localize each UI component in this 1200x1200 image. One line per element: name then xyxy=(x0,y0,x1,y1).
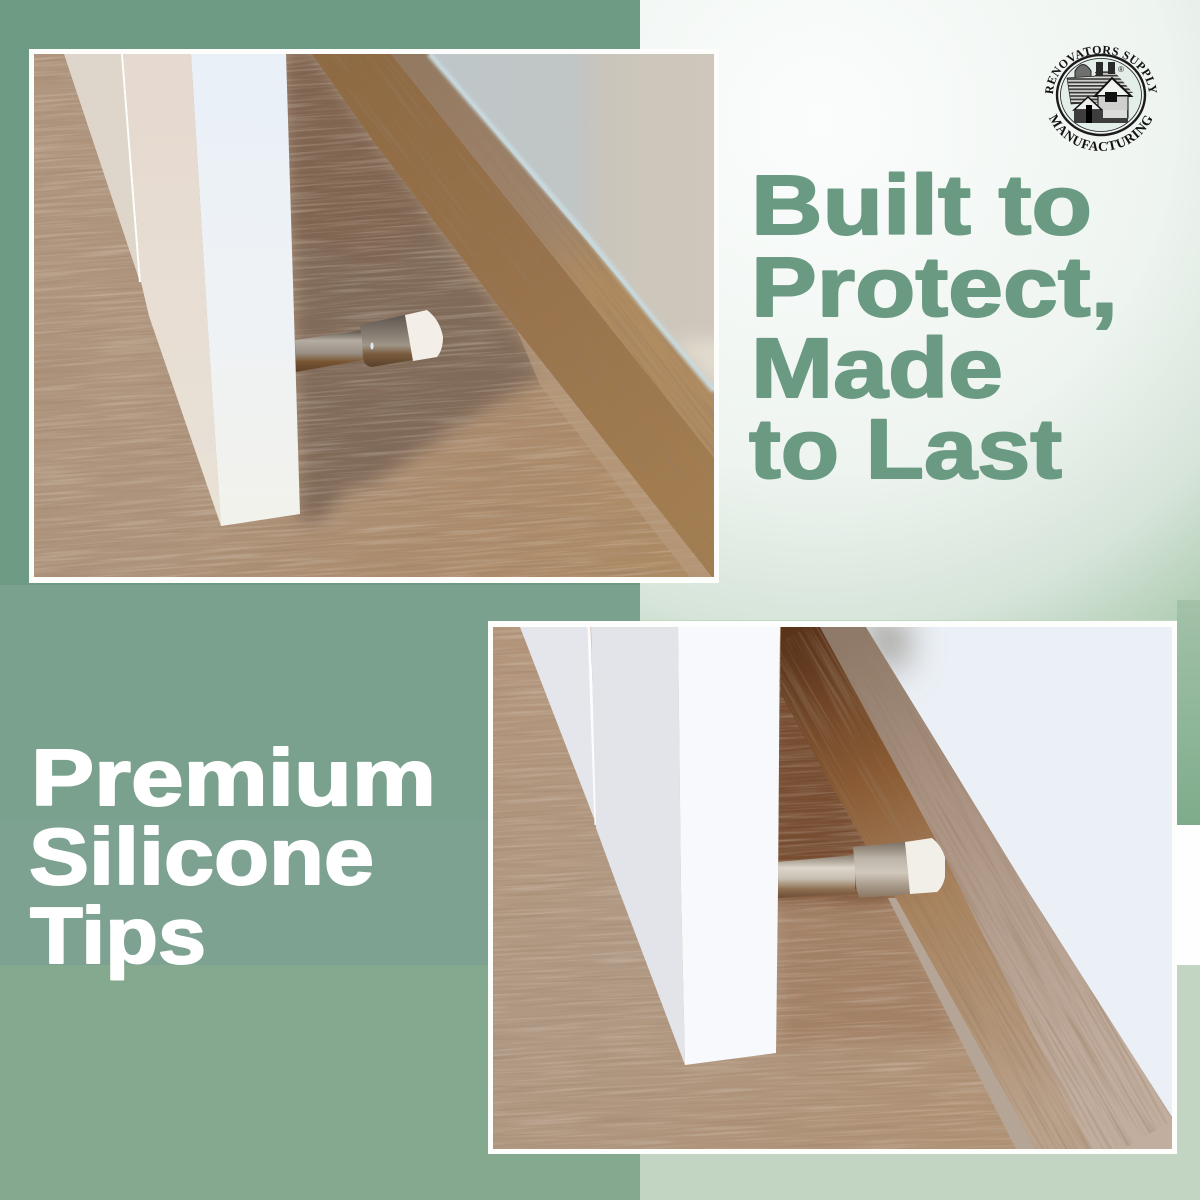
heading: Premium Silicone Tips: Tips xyxy=(30,891,206,980)
heading: Built to Protect, Made to Last: Protect, xyxy=(751,240,1118,334)
logo text: top arc: RENOVATORS SUPPLY xyxy=(1045,46,1157,94)
logo text: bottom arc: MANUFACTURING xyxy=(1048,113,1152,151)
photo: door stopper on door, close view xyxy=(488,621,1177,1154)
logo: Renovators Supply Manufacturing xyxy=(1045,46,1157,151)
icon: stopper rod and silicone tip, close xyxy=(778,838,945,898)
heading: Built to Protect, Made to Last: Built to xyxy=(751,158,1092,252)
icon: house in logo: ® xyxy=(1118,65,1124,74)
heading: Premium Silicone Tips: Premium xyxy=(31,733,436,822)
photo: door stopper on door, left view xyxy=(29,49,719,583)
heading: Built to Protect, Made to Last: to Last xyxy=(749,402,1062,496)
heading: Premium Silicone Tips xyxy=(29,733,436,980)
icon: stopper rod and silicone tip xyxy=(295,310,443,372)
heading: Premium Silicone Tips: Silicone xyxy=(29,812,374,901)
heading: Built to Protect, Made to Last xyxy=(749,158,1118,496)
heading: Built to Protect, Made to Last: Made xyxy=(751,321,1003,415)
